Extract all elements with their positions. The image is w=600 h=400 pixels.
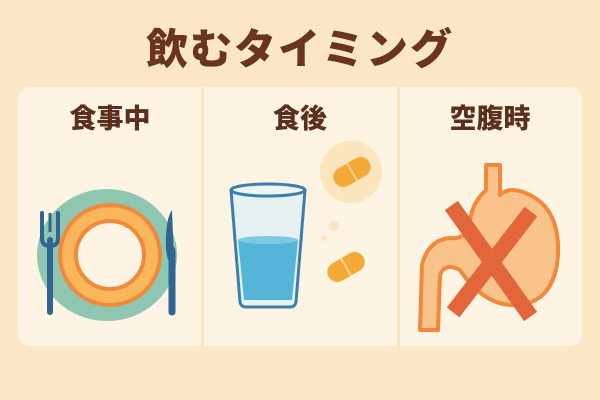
heading: empty stomach: 空腹時 xyxy=(450,104,530,134)
heading: during meal: 食事中 xyxy=(70,104,150,134)
panels background xyxy=(18,87,582,346)
title: 飲むタイミング xyxy=(146,26,454,73)
icon: pills xyxy=(320,141,382,286)
dividers xyxy=(201,87,204,346)
icon: stomach with cross xyxy=(420,165,558,330)
icon: plate with cutlery xyxy=(37,189,177,321)
icon: glass of water xyxy=(231,184,305,307)
heading: after meal: 食後 xyxy=(273,104,327,134)
